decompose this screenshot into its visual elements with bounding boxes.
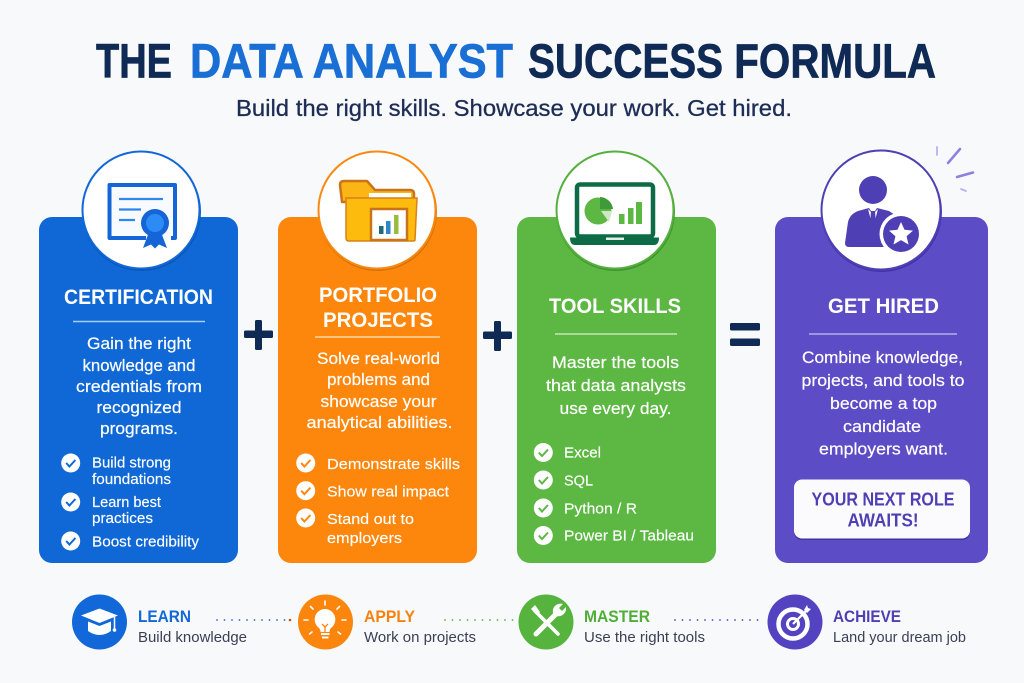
step: apply: APPLY [364,607,416,626]
heading: PORTFOLIO [319,284,437,307]
step: master [518,594,705,650]
step: apply: Work on projects [364,630,476,646]
step: master: Use the right tools [584,630,705,646]
checklist: Stand out to [327,512,414,528]
checklist: Learn best [92,495,161,511]
description: Gain the right [87,334,191,353]
description: showcase your [320,392,437,411]
heading: CERTIFICATION [64,286,213,309]
step: learn: LEARN [138,607,191,626]
checklist: Show real impact [327,485,449,501]
description: analytical abilities. [306,413,452,432]
step: achieve: ACHIEVE [833,607,901,626]
sparkle rays [937,147,973,191]
title: SUCCESS FORMULA [528,36,936,88]
checklist: Power BI / Tableau [564,529,694,545]
checklist: Build strong [92,456,171,472]
callout button [794,480,970,540]
equals sign [730,323,760,346]
heading: PROJECTS [323,309,433,332]
icon: folder [318,152,437,271]
step: learn [72,594,247,650]
description: Combine knowledge, [802,348,963,367]
heading: TOOL SKILLS [549,295,681,318]
description: candidate [843,417,921,436]
description: credentials from [76,377,202,396]
description: become a top [830,394,937,413]
dotted connector 2 [445,619,513,621]
icon: certificate [82,152,201,271]
subtitle: Build the right skills. Showcase your work. Get hired. [236,95,792,121]
description: Solve real-world [317,349,440,368]
description [546,353,686,418]
heading [319,284,437,332]
step: achieve: Land your dream job [833,630,966,646]
checklist: employers [327,531,402,547]
icon: hired person with star [821,150,942,272]
checklist: Demonstrate skills [327,457,460,473]
checklist [61,454,200,550]
callout button: AWAITS! [848,510,918,530]
description [306,349,452,432]
icon: laptop [556,152,675,271]
icon: target [768,594,822,650]
description: use every day. [560,399,672,418]
plus sign 1 [244,320,273,350]
panel: certification [39,152,238,563]
checklist [296,454,460,547]
description: recognized [96,398,182,417]
description: knowledge and [82,356,196,375]
dotted connector 3 [675,619,760,621]
description: Master the tools [552,353,679,372]
checklist: Boost credibility [92,534,200,550]
icon: light bulb [298,594,353,650]
dotted connector 1 [217,619,287,621]
heading: GET HIRED [828,295,939,318]
description [802,348,964,458]
checklist [534,443,694,545]
title: THE [96,36,172,88]
checklist: SQL [564,474,593,490]
panel: get hired [775,150,988,563]
panel: tool skills [517,152,716,563]
checklist: Excel [564,446,601,462]
plus sign 2 [483,321,512,351]
checklist: practices [92,511,153,527]
description [76,334,202,438]
checklist: foundations [92,472,171,488]
step: achieve [768,594,966,650]
icon: crossed tools [518,594,574,650]
description: programs. [100,419,178,438]
step: apply [298,594,476,650]
icon: graduation cap [72,594,127,650]
step: learn: Build knowledge [138,630,247,646]
title [96,36,936,88]
description: employers want. [819,440,948,458]
step: master: MASTER [584,607,650,626]
description: that data analysts [546,376,686,395]
description: projects, and tools to [802,371,964,390]
title: DATA ANALYST [190,36,513,88]
checklist: Python / R [564,501,637,517]
description: problems and [327,370,430,389]
panel: portfolio projects [278,152,477,563]
callout button: YOUR NEXT ROLE [812,490,954,510]
